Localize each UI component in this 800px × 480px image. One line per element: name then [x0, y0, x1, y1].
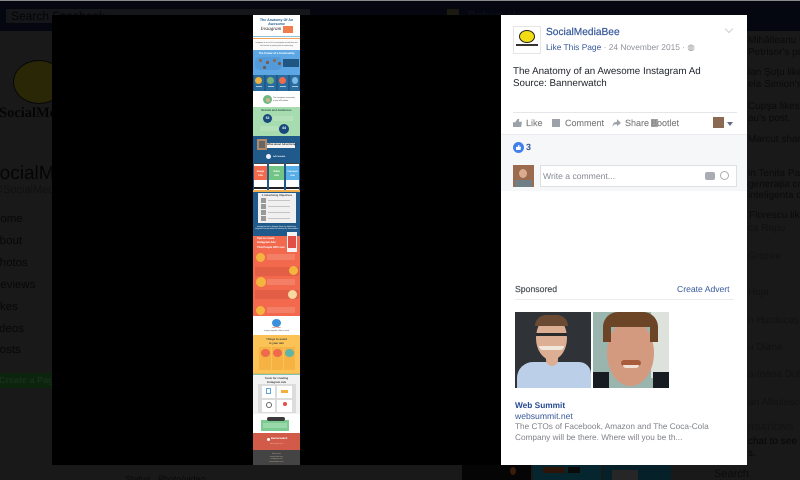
brands and audiences: 53: [266, 116, 269, 120]
tools section: Instagram Ads: [267, 380, 286, 384]
white stat with green badge: [253, 91, 300, 107]
strip title section: Instagram: [261, 26, 281, 32]
brands and audiences: Brands and Audiences: [261, 108, 292, 112]
brands and audiences: 44: [282, 126, 286, 130]
post meta: Like This Page · 24 November 2015 · ◍: [546, 42, 695, 52]
tips panel: [253, 236, 300, 316]
facebook post panel: [501, 15, 747, 465]
references footer: References: [272, 453, 281, 455]
tips panel: Instagram Ads: [257, 241, 276, 244]
strip title section: Awesome: [268, 22, 285, 26]
icon: comment: [552, 119, 560, 127]
ad format cards: [253, 163, 300, 190]
four stat columns: [253, 75, 300, 91]
footer brand: [253, 433, 300, 450]
dimmed facebook background: au's post.: [748, 112, 790, 124]
post text: Source: Bannerwatch: [513, 78, 607, 89]
page name: SocialMediaBee: [546, 27, 620, 38]
quote section: Imagery appeals. Make it visual: [264, 330, 289, 332]
card: carousel ads: Carousel: [287, 170, 298, 172]
dimmed facebook background: RSATIONS: [748, 422, 793, 432]
things to avoid: Things to avoid: [266, 337, 287, 341]
dimmed facebook background: Home: [508, 10, 539, 22]
sponsored header: Sponsored: [515, 284, 557, 294]
card: image ads: Ads: [258, 174, 263, 177]
comment area: [501, 134, 747, 191]
things to avoid: in your ads: [269, 341, 284, 345]
dimmed facebook background: Grozea: [748, 251, 781, 262]
community panel with world map: The Power of a Community: [258, 51, 295, 55]
action bar: Comment: [565, 118, 604, 128]
commenter avatar: [513, 165, 534, 187]
comment input: Write a comment...: [543, 171, 615, 181]
strip title section: The Anatomy Of An: [260, 18, 293, 22]
strip title section: [253, 15, 300, 40]
what about advertising: What about Advertising?: [267, 143, 298, 146]
dimmed facebook background: Huja: [748, 287, 769, 298]
dimmed facebook background: n Hurducaș: [748, 315, 799, 326]
post text: The Anatomy of an Awesome Instagram Ad: [513, 66, 701, 77]
dimmed facebook background: s.: [748, 448, 756, 458]
references footer: socialmedia.com: [270, 456, 283, 458]
action bar: [513, 117, 733, 128]
tools section: [253, 375, 300, 414]
facebook post panel: The CTOs of Facebook, Amazon and The Coca-Cola: [515, 422, 709, 431]
action bar: Bootlet: [651, 118, 679, 128]
dimmed facebook background: ca Rapu: [748, 223, 785, 234]
icon: like: [513, 119, 522, 127]
tools section: Tools for creating: [265, 376, 288, 380]
dimmed facebook background: Search Facebook: [11, 9, 105, 23]
things to avoid: [253, 335, 300, 373]
action bar: Share: [625, 118, 649, 128]
dimmed facebook background: Search: [714, 468, 749, 480]
advertising objectives: 4 Advertising Objectives: [262, 194, 292, 196]
lightbox stage: [52, 15, 501, 465]
card: video ads: Video: [273, 170, 280, 172]
community panel with world map: [253, 50, 300, 75]
comment input: [540, 165, 737, 187]
references footer: [253, 450, 300, 465]
footer brand: bannerwatch.com: [270, 443, 283, 445]
card: video ads: Ads: [274, 174, 279, 177]
intro text: Instagram is one of the most popular social sites and with brands is growing fast for advertising: [256, 42, 297, 47]
infographic strip: [253, 15, 300, 465]
references footer: bannerwatch.com: [269, 461, 284, 463]
white stat with green badge: is over 400 million: [273, 100, 288, 102]
dimmed facebook background: SocialMedia: [0, 105, 76, 121]
ad text: Web Summit: [515, 400, 565, 410]
post text: [513, 66, 701, 89]
card: image ads: [254, 163, 267, 190]
white stat with green badge: The Instagram community: [273, 97, 295, 99]
footer brand: Bannerwatch: [271, 437, 287, 440]
tips panel: Tips to create: [257, 237, 274, 240]
create advert link: Create Advert: [677, 284, 730, 294]
references footer: instagram.com: [271, 458, 282, 460]
avatar selector: [713, 117, 724, 128]
ad photo 1: [515, 312, 591, 388]
card: carousel ads: Ads: [290, 174, 295, 177]
what about advertising: [253, 136, 300, 164]
card: image ads: Image: [257, 170, 264, 172]
card: carousel ads: [286, 163, 299, 190]
what about advertising: Ad Formats: [273, 156, 285, 158]
ad photo 2: [593, 312, 669, 388]
dimmed facebook background: Create a Page: [0, 375, 59, 385]
quote section: [253, 316, 300, 335]
action bar: Like: [526, 118, 543, 128]
green badge section: [253, 414, 300, 433]
icon: like count: [513, 142, 524, 153]
brands and audiences: [253, 107, 300, 136]
chevron: [725, 25, 733, 33]
quote section: Neil Patel: [272, 327, 281, 329]
icon: share: [612, 119, 621, 127]
tips panel: That People Will Love: [257, 246, 285, 249]
facebook post panel: websummit.net: [515, 410, 573, 420]
dimmed facebook background: u Diana: [748, 342, 782, 353]
page avatar: [513, 26, 541, 54]
card: video ads: [269, 163, 284, 190]
facebook post panel: Company will be there. Where will you be th...: [515, 433, 682, 442]
dimmed facebook background: Robert: [468, 10, 503, 22]
comment area: 3: [526, 142, 531, 152]
advertising objectives: Instagram has a deeper focus on optimizing targeted and personal ad content for consumers: [255, 226, 298, 230]
intro text: [253, 40, 300, 50]
advertising objectives: [253, 192, 300, 236]
